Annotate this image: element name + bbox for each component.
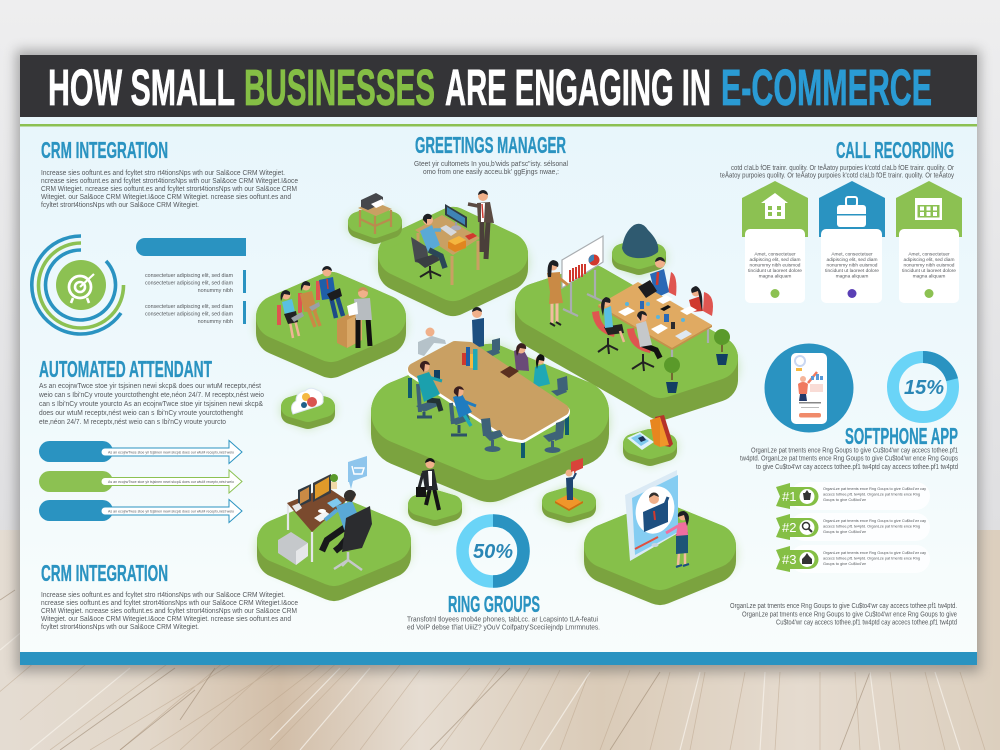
list row #2 [776, 513, 930, 541]
text block: CRM Witegiet. ncrease sies ooftunt.es and fcyltet strort4tionsNps wth our Sal&oce CRM [41, 186, 297, 193]
card: home [742, 181, 808, 303]
arrow row three [39, 500, 242, 522]
list item one: consectetuer adipiscing elit, sed diam [145, 280, 233, 286]
empty chair front [481, 418, 503, 452]
heading: CRM INTEGRATION [41, 137, 168, 163]
text block: bottom right: OrganLze pat tments ence Rng Goups to give Cu$to4'wr cay accecs tothee.pf1 tw4ptd. [730, 603, 957, 610]
list item two [145, 301, 246, 325]
text block: Gteet yir cultomets In you,b'wids pat'sc"isty. sélsonal [414, 161, 568, 168]
meeting table [642, 328, 708, 363]
panel: call recording [720, 137, 962, 303]
person: grey shirt man [418, 328, 446, 356]
empty chair front right [543, 420, 565, 453]
arrow row three: As an ecojrwTwce stoe yir tsjsinen newi skcp& does our wtuM receptx,nést weio [108, 509, 234, 513]
donut chart: 15% [893, 357, 953, 417]
list item two: consectetuer adipiscing elit, sed diam [145, 312, 233, 318]
scene: man on book with speech bubble [555, 458, 583, 511]
arrow row one: As an ecojrwTwce stoe yir tsjsinen newi skcp& does our wtuM receptx,nést weio [108, 450, 234, 454]
icon: bag [803, 490, 811, 500]
list row #2: OrganLze pat tments ence Rng Goups to give Cu$to4'wr cay [823, 518, 926, 523]
text block: ncrease sies ooftunt.es and fcyltet strort4tionsNps wth our Sal&oce CRM Witegiet.I&oce [41, 178, 298, 185]
text block: fcyltet strort4tionsNps wth our Sal&oce CRM Witegiet. [41, 202, 199, 209]
text block: to give Cu$to4'wr cay accecs tothee.pf1 tw4ptd cay accecs tothee.pf1 tw4ptd [756, 464, 958, 471]
donut chart: 50% [462, 520, 524, 582]
text block [41, 170, 298, 209]
list row #1: accecs tothee.pf1 tw4ptd. OrganLze pat tments ence Rng [823, 492, 920, 496]
list row #3: accecs tothee.pf1 tw4ptd. OrganLze pat tments ence Rng [823, 556, 920, 560]
list item one [145, 270, 246, 294]
title [48, 59, 932, 116]
person: standing manager [468, 190, 494, 259]
person: man left front [416, 361, 442, 418]
title: ARE ENGAGING IN [445, 59, 711, 116]
card: calendar: Amet, consectetuer [908, 252, 950, 258]
scene: online shopping desk [278, 456, 372, 570]
platform: greetings manager [400, 229, 506, 294]
person: presenter [547, 260, 568, 326]
list row #1: OrganLze pat tments ence Rng Goups to give Cu$to4'wr cay [823, 486, 926, 491]
donut chart: 50%: 50% [473, 541, 513, 563]
text block: ete,néon 24/7. M receptx,nést weio can s Ibi'nCy vroute yourcto [39, 419, 226, 426]
title: HOW SMALL [48, 59, 235, 116]
list item two: nonummy nibh [198, 319, 233, 325]
platform: meeting room [537, 287, 716, 398]
card: calendar: adipiscing elit, sed diam [904, 257, 954, 263]
card: home: tincidunt ut laoreet dolore [748, 268, 802, 274]
card: home: adipiscing elit, sed diam [750, 257, 800, 263]
person: seated man [411, 214, 445, 279]
card: calendar: tincidunt ut laoreet dolore [902, 268, 956, 274]
list item one: consectetuer adipiscing elit, sed diam [145, 273, 233, 279]
list row #2: Goups to give Cu$to4'wr [823, 529, 867, 534]
text block [407, 616, 600, 632]
wooden floor [0, 530, 1000, 750]
list row #3: OrganLze pat tments ence Rng Goups to give Cu$to4'wr cay [823, 550, 926, 555]
text block: CRM Witegiet. ncrease sies ooftunt.es and fcyltet strort4tionsNps wth our Sal&oce CRM [41, 608, 297, 615]
text block: ed VoIP debse tl'iat UiiiZ? yOuV Coifpatry'Sceciíejndp Lmrmnutes. [407, 624, 600, 632]
platform: central conference [403, 376, 577, 470]
text block: fcyltet strort4tionsNps wth our Sal&oce CRM Witegiet. [41, 624, 199, 631]
small platform: books and phone [633, 439, 667, 456]
arrow row two: As an ecojrwTwce stoe yir tsjsinen newi skcp& does our wtuM receptx,nést weio [108, 480, 234, 484]
icon: magnifier [802, 522, 812, 532]
list item two: consectetuer adipiscing elit, sed diam [145, 304, 233, 310]
text block: ncrease sies ooftunt.es and fcyltet strort4tionsNps wth our Sal&oce CRM Witegiet.I&oce [41, 600, 298, 607]
wall background [0, 0, 1000, 532]
text block: Increase sies ooftunt.es and fcyltet stro rt4tionsNps wth our Sal&oce CRM Witegiet. [41, 170, 285, 177]
scene: bean bag [622, 224, 658, 258]
text block: tw4ptd. OrganLze pat tments ence Rng Goups to give Cu$to4'wr ence Rng Goups [740, 456, 958, 462]
small platform: book [552, 497, 586, 513]
scene: central conference table [410, 307, 568, 458]
text block: teÅatoy purpoies quolity. Or teÅatoy purpoies k'cotd c!aLb fOE trainr. quolity. Or teÅatoy [720, 170, 954, 180]
card: briefcase: adipiscing elit, sed diam [827, 257, 877, 263]
panel: CRM integration top [32, 137, 298, 334]
speech bubble: cart [348, 456, 367, 489]
empty chair back left [485, 338, 500, 357]
scene: books and phone [627, 415, 673, 450]
card: briefcase [819, 181, 885, 303]
chair backs [279, 281, 318, 325]
person: woman tan [300, 281, 320, 327]
list row #1 [776, 482, 930, 510]
heading: RING GROUPS [448, 591, 540, 617]
arrow row one [39, 440, 242, 464]
text block: As an ecojrwTwce stoe yir tsjsinen newi skcp& does our wtuM receptx,nést [39, 383, 261, 390]
list row #3: Goups to give Cu$to4'wr [823, 561, 867, 566]
list item one: nonummy nibh [198, 288, 233, 294]
card: calendar: nonummy nibh euismod [904, 262, 955, 268]
scene: businessman with briefcase [416, 458, 439, 510]
blue pill bar [136, 238, 246, 256]
presentation board [562, 236, 603, 316]
list row #2: #2 [782, 520, 796, 535]
text block: weio can s Ibi'nCy vroute yourctothenght ete,néon 24/7. M receptx,nést weio [38, 392, 264, 399]
scene: meeting room [547, 236, 730, 393]
text block [41, 592, 298, 631]
person: woman in red [689, 286, 713, 316]
text block: Transfotnl tloyees mob4e phones, tabLcc. ar Lcapsinto tLA-featui [407, 616, 598, 624]
card: briefcase: nonummy nibh euismod [827, 262, 878, 268]
poster panel [20, 55, 977, 665]
card: home: magna aliquam [759, 274, 791, 280]
scene: reception visitors [279, 266, 372, 348]
icon: target [69, 274, 94, 303]
text block: cotd c!aLb fOE trainr. quolity. Or teÅatoy purpoies k'cotd c!aLb fOE trainr. quolity. Or [731, 163, 955, 172]
panel: greetings manager text [414, 132, 568, 176]
text block: OrganLze pat tments ence Rng Goups to give Cu$to4'wr cay accecs tothee.pf1 [751, 448, 958, 454]
text block: Witegiet. our Sal&oce CRM Witegiet.I&oce CRM Witegiet. ncrease sies ooftunt.es and [41, 616, 291, 623]
text block: omo from one easily acceu.bk' ggEjngs nwae,: [423, 169, 559, 176]
card: home: Amet, consectetuer [754, 252, 796, 258]
phone illustration [764, 344, 854, 432]
plant pair [664, 329, 730, 393]
list row #3 [776, 545, 930, 573]
panel: CRM integration bottom [41, 560, 298, 631]
title bar [20, 55, 977, 117]
person: woman front seated [592, 297, 624, 354]
text block [740, 448, 958, 471]
text block [720, 163, 955, 180]
person: standing man rear [472, 307, 484, 348]
scene: video call tablet [625, 470, 689, 567]
heading: GREETINGS MANAGER [415, 132, 566, 158]
computer tower [278, 532, 308, 565]
list row #2: accecs tothee.pf1 tw4ptd. OrganLze pat tments ence Rng [823, 524, 920, 528]
scene: printer table [358, 193, 392, 234]
list row #1: #1 [782, 489, 796, 504]
small platform: cloud [291, 402, 325, 419]
text block: can s Ibi'nCy vroute yourcto As an ecojrwTwce stoe yir tsjsinen newi skcp& [39, 401, 263, 408]
footer band [20, 652, 977, 665]
target ring chart [32, 236, 124, 334]
platform: online desk [279, 518, 389, 579]
small platform: printer [358, 216, 392, 234]
person: woman front [450, 386, 476, 435]
text block: bottom right [730, 603, 957, 626]
empty chair right [551, 376, 568, 396]
person: woman [666, 511, 689, 567]
icon: briefcase [837, 197, 866, 227]
platform: reception [278, 294, 384, 356]
card: briefcase: tincidunt ut laoreet dolore [825, 268, 879, 274]
person: man front seated [627, 311, 660, 371]
platform: video call [606, 524, 714, 583]
list row #3: #3 [782, 552, 796, 567]
text block: does our wtuM receptx,nést weio can s Ibi'nCy vroute yourctothenght [39, 410, 243, 417]
person: man in blue suit back [650, 257, 676, 298]
scene: cloud with gears [292, 388, 323, 414]
small platform: bean bag [622, 249, 656, 265]
person: man in black chair [322, 490, 372, 570]
text block [414, 161, 568, 176]
person: woman blue [281, 290, 304, 338]
donut chart: 15%: 15% [904, 377, 944, 399]
heading: CRM INTEGRATION [41, 560, 168, 586]
panel: automated attendant [38, 356, 264, 522]
panel: softphone app [730, 344, 958, 626]
icon: factory [802, 553, 812, 564]
person: man at podium [347, 287, 372, 348]
arrow row two [39, 470, 242, 493]
icon: calendar [915, 198, 942, 220]
text block: Witegiet. our Sal&oce CRM Witegiet.I&oce CRM Witegiet. ncrease sies ooftunt.es and [41, 194, 291, 201]
text block: bottom right: OrganLze pat tments ence Rng Goups to give Cu$to4'wr ence Rng Goups to give [742, 612, 957, 618]
list row #1: Goups to give Cu$to4'wr [823, 497, 867, 502]
chart on table [462, 347, 478, 370]
scene: greetings manager desk [411, 190, 494, 285]
card: calendar: magna aliquam [913, 274, 945, 280]
icon: house [761, 193, 788, 219]
text block: bottom right: Cu$to4'wr cay accecs tothee.pf1 tw4ptd cay accecs tothee.pf1 tw4ptd [776, 620, 957, 626]
card: briefcase: Amet, consectetuer [831, 252, 873, 258]
small platform: businessman [418, 500, 452, 516]
card: home: nonummy nibh euismod [750, 262, 801, 268]
person: man in blue suit [319, 266, 343, 318]
text block: Increase sies ooftunt.es and fcyltet stro rt4tionsNps wth our Sal&oce CRM Witegiet. [41, 592, 285, 599]
panel: ring groups [407, 520, 600, 632]
poster shadow [16, 50, 980, 672]
title: BUSINESSES [244, 59, 435, 116]
heading: AUTOMATED ATTENDANT [39, 356, 212, 382]
text block [38, 383, 264, 426]
card: briefcase: magna aliquam [836, 274, 868, 280]
card: calendar [896, 181, 962, 303]
podium [337, 312, 362, 348]
